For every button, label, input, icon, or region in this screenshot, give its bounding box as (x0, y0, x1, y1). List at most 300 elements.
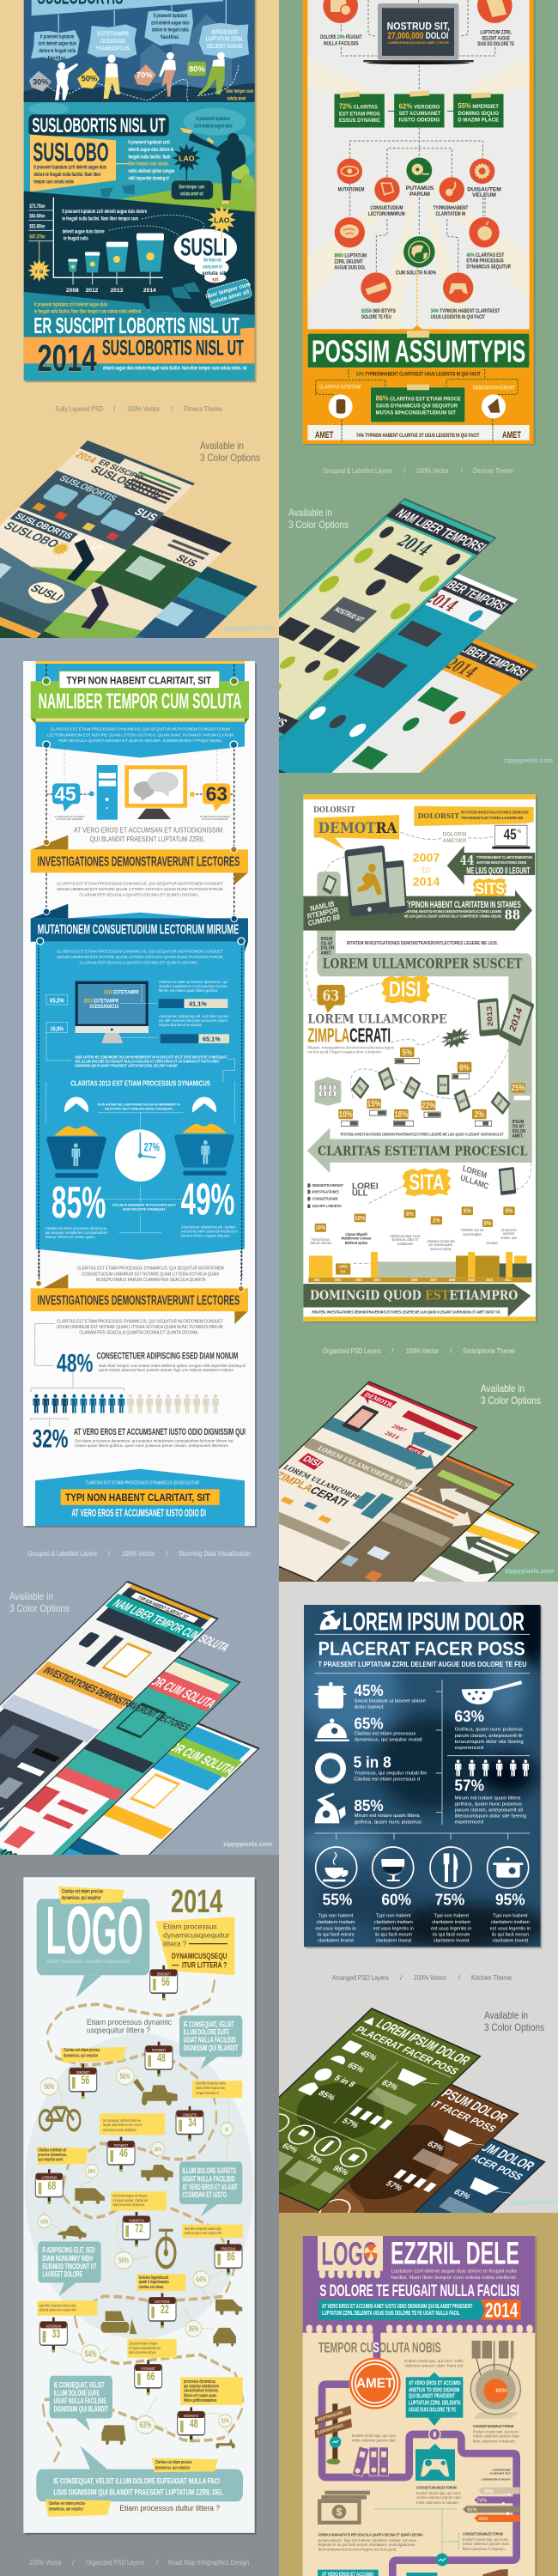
icon: laptop circle (374, 177, 400, 203)
callout: speech box 4: DELENIT AUGUE (207, 42, 243, 50)
text block: paragraph 1: UDIUM LMMIRUM EST NOTARE QUAM LITTERA GOTHICA QUAM NUNC PUTAMUS PARUM (57, 887, 222, 892)
text: available in kitchen (484, 2009, 544, 2033)
icon: laptop screen: 27,000,000 DOLOI (387, 31, 448, 41)
logo plate (318, 2236, 383, 2278)
callouts: phone percentage tags: 25% (512, 1083, 525, 1092)
stat: 45%: 45% (354, 1681, 384, 1699)
caption: kitchen: 100% Vector (414, 1974, 446, 1982)
labels: yellow notes: etiam processus dynam. (129, 2349, 156, 2354)
text: right note (181, 1224, 238, 1237)
text: teal box copy: IE CONSEQUAT, VELSIT (184, 2020, 234, 2029)
icon: banknotes: $ (337, 2506, 343, 2518)
bar chart: yearly timeline: 2011 (505, 1279, 511, 1282)
text: bottom columns: iis qui facit eorum (317, 1932, 355, 1937)
text: yellow note: liber tempor cum (226, 88, 253, 94)
bar chart: yearly timeline: nend eleoption (463, 1232, 482, 1236)
stat: 63%: 63% (454, 1707, 484, 1725)
heading: 2014: 2014 (37, 337, 97, 380)
stat: left percentages (46, 994, 68, 1033)
text: middle labels: MUTATIONEM (338, 187, 365, 193)
caption: road map (29, 2559, 249, 2567)
text: map label: DELENIT AUGUE (482, 35, 510, 41)
bar chart: cup growth: 2014 (143, 288, 156, 294)
text: lower labels: ZZRIL DELENIT (334, 258, 363, 264)
icon: pipe node (429, 2428, 440, 2440)
chart: scattered phones timeline: 2010 (440, 1083, 447, 1087)
mockup: kitchen three colour posters: 57% (383, 2179, 405, 2193)
caption: devices: / (461, 467, 464, 475)
chart: scattered phones timeline: 2001 (356, 1084, 365, 1093)
mockup: kitchen three colour posters: 57% (339, 2117, 361, 2130)
text: left note: Claritas est etiam processus dynamicus, (45, 1226, 107, 1230)
mockup: smartphone three colour posters: SITS (405, 1446, 423, 1457)
text: bottom columns: Typi non habent (318, 1914, 354, 1919)
heading: er suscipit: ER SUSCIPIT LOBORTIS NISL UT (33, 313, 240, 338)
text block: paragraph 1: CLARITAS EST ETIAM PROCESSUS DYNAMICUS, QUI SEQUITUR MUTATIONEM CONSUET (57, 881, 223, 886)
icon: yellow star LAO: LAO (214, 216, 230, 224)
icon: pot circle (488, 1847, 529, 1888)
text: formas heading: legentis in iis qui facit eorum claritatem. Investigationes (318, 2543, 415, 2547)
heading: navy ribbon (31, 904, 248, 951)
arrows: between boxes (388, 109, 456, 113)
text block: blue ribbon: LECTORUMMIRUM EST NOTARE QUAM LITTERA GOTHICA, QUAM NUNC PUTAMUS PARUM CLARAM (47, 732, 234, 738)
callout: yellow question (155, 1917, 234, 1975)
mockup: kitchen three colour posters: 55% (255, 2130, 275, 2143)
mockup: fitness three colour posters: SUSLOBORTIS (57, 474, 118, 503)
callout: speech box 2: OCESSUSD (100, 37, 125, 45)
text: consuetudium 3: CONSUETUDIUMLECTORUM (463, 2531, 503, 2537)
callouts: phone percentage tags: 18% (394, 1109, 408, 1119)
icons: milestone signs (35, 1965, 242, 2442)
text block: paragraph 4 (57, 1319, 224, 1336)
text: teal box copy (42, 2020, 238, 2497)
bar chart: cup growth: 2013 (111, 288, 124, 294)
panel: smartphone infographic (303, 794, 537, 1322)
icons: milestone signs: HUMANITAS (129, 2218, 144, 2223)
callout: speech box 3: dolore te feugait nulla (152, 27, 189, 33)
text: lower labels: AUGUE DUIS DOL (334, 264, 366, 270)
icon: phones 2013 2014: 2014 (507, 1005, 525, 1034)
icon: laptop screen (363, 3, 474, 64)
text: bottom columns: claritatem Invest (434, 1939, 470, 1944)
mockup: kitchen three colour posters: PLACERAT FACER POSS (417, 2129, 526, 2183)
text: available in tan (200, 440, 260, 464)
text: small note: Ritatem, investigationes demonstraverunlectores legere (307, 1045, 395, 1050)
caption: smartphone: Smartphone Theme (463, 1347, 515, 1355)
labels: yellow notes: Nam liber temporsit soluta nobis (185, 2226, 221, 2231)
arrows: chevrons (100, 185, 200, 312)
bar chart: yearly timeline: decima et quinta (430, 1248, 452, 1251)
chart: percent circles: 54% (85, 2348, 97, 2359)
mockup: fitness three colour posters: 2014 (73, 451, 99, 465)
labels: yellow notes: Claritas estetiam sit (38, 2148, 67, 2152)
text block: grey statement: QUI BLANDIT PRAESENT LUPTATUM ZZRIL (90, 835, 205, 843)
text: available in green: 3 Color Options (288, 519, 349, 531)
icon: signpost: ELEIFENDOPTIONOS (317, 2423, 344, 2436)
labels: yellow notes: Mirum est notare quam (184, 2393, 216, 2398)
bar chart: yearly timeline: TEMPOR cum est (461, 1229, 483, 1232)
bar chart: yearly timeline: 8% (406, 1211, 414, 1218)
callout: teal speech: UGUE DUIS DOLORE TE FE (409, 2407, 456, 2413)
icon: dome (315, 1718, 349, 1741)
callout: speech box 3: zzril delenit augue duis (151, 20, 190, 26)
text block: bold white note (75, 1055, 227, 1068)
callout: speech box 4: IEPRAESENT (211, 27, 238, 35)
heading: susloboritis nisl ut (28, 114, 169, 137)
icon: apple circle (469, 217, 500, 247)
text: ipsum tag 2: DOLOR (513, 1128, 526, 1134)
icon: laptop screen: NOSTRUD SIT, (387, 20, 450, 32)
bar chart: yearly timeline: 8% (484, 1220, 491, 1227)
bar chart: yearly timeline: Claritas est etiam conse (390, 1235, 421, 1238)
callout: 72% box: ESSUS DYNAMIC (339, 118, 380, 124)
mockup: smartphone three colour posters: ZIMPLACERATI (272, 1469, 351, 1509)
chart: percent circles: 36% (154, 2146, 162, 2154)
icon: map circle (477, 0, 513, 23)
callout: speech box 3 (144, 9, 193, 46)
text: available in blue-grey: 3 Color Options (9, 1602, 70, 1614)
text: teal box copy: UGIAT NULLA FACILISIS (54, 2397, 106, 2406)
callout: speech box 2: ESTETIAMPR (97, 30, 130, 38)
text: 32% detail (74, 1428, 246, 1448)
text: middle labels: TYPINONHABENT (434, 205, 468, 211)
callout: SITS: SITS (476, 879, 505, 898)
heading: demotra (314, 815, 399, 850)
callout: 63 bubble: 63 (323, 987, 339, 1005)
text: bottom columns: claritatem Invest (318, 1939, 354, 1944)
labels: yellow notes: qui sequitur amet (38, 2157, 64, 2161)
bar chart: 65.1%: Amectetuer adipiscing elit, sed diam nonum (159, 1014, 229, 1018)
caption: devices: / (403, 467, 406, 475)
bar chart: yearly timeline: 2001 (314, 1279, 320, 1282)
text: ipsum tag: DOLOR (321, 945, 335, 951)
stat: 57%: 57% (454, 1777, 484, 1795)
text: 32% detail: Est etiam processus dynamicus, qui sequitur mutationem consuetudium lectorum Mirum est (75, 1439, 234, 1443)
labels: yellow notes (36, 2047, 243, 2517)
text: teal box copy: LAOREET DOLORE (42, 2269, 82, 2279)
heading: yellow ribbon 2: INVESTIGATIONES DEMONSTRAVERUNT LECTORES (38, 1293, 240, 1309)
text: small right notes: LOREMIPSUMDI ACUMSANAT (482, 2478, 511, 2482)
bar chart: cup growth: $47.37bn (29, 234, 45, 240)
stat: 85% (354, 1796, 422, 1825)
stat: 57%: parum claram, anteposuerit all (455, 1807, 523, 1813)
text strip: amet: 74% TYPINON HABENT CLARITAE ST USUS LEGENTIS IN QUI FACIT (356, 433, 479, 439)
text: teal box copy: ILLUM DOLORE EUFE (184, 2027, 229, 2037)
teal ribbon with 2014: 2014 (485, 2299, 519, 2322)
panel: fitness infographic (24, 0, 257, 382)
text: header intro: facilisi. Nam liber tempor cum soluta nobis eleifend (391, 2275, 516, 2281)
text: teal box copy: EUISMOD TINCIDUNT UT (42, 2262, 97, 2271)
icons: milestone signs: DEMONSTI (157, 1971, 171, 1976)
mockup: devices three colour posters (279, 498, 537, 773)
bar chart: yearly timeline: 2007 (430, 1279, 437, 1282)
mockup: data visualisation three colour posters: TYPI NON HABENT CLARITAIT, SIT (136, 1595, 190, 1620)
bar chart: 41.1% (159, 980, 227, 1008)
bar chart: 65.1%: magna aliquam erat volutpat (159, 1023, 203, 1027)
icon: large monitor: 2013 ESTETIAMPR (84, 999, 118, 1005)
chart: people row (33, 1394, 219, 1413)
text block: paragraph 2: CLARAM PER SEACULA QUARTA DECIMA ET QUINTA DECIMA. (79, 961, 199, 966)
teal tile bottom (406, 2573, 437, 2576)
text: teal box copy: IE CONSEQUAT, VELSIT (54, 2380, 105, 2390)
text: available in tan: 3 Color Options (200, 452, 260, 464)
chart: scattered phones timeline: 2003 (383, 1074, 391, 1083)
bar chart: cup growth: $73.75bn (29, 204, 45, 210)
bar chart: yearly timeline: Litteratum formas fata (427, 1240, 455, 1243)
caption: fitness: Fitness Theme (184, 405, 222, 413)
callout: yellow question: Etiam processus (163, 1923, 217, 1931)
stat: 57% (454, 1777, 526, 1825)
mockup: fitness three colour posters (0, 440, 258, 638)
stats: bottom percentages: 55% (323, 1890, 353, 1908)
text: ipsum tag: ITA SIT (321, 941, 333, 947)
text: cloud note: zzril delenit augue duis (194, 123, 233, 129)
stat: 48%: 48% (57, 1350, 93, 1378)
text: small right notes: LOREMIPSUMDI (492, 2468, 511, 2471)
icon: white pies (64, 1097, 216, 1113)
icon: large monitor: OCESSUSOICUS (89, 1004, 118, 1010)
stat: 63%: terarumspum dolor site Seeing (455, 1740, 524, 1745)
text: cloud note: It praesent luptatum (197, 116, 230, 122)
chart: percent circles: 56% (120, 2072, 130, 2081)
callout: SUSLI bubble: SUSLI (180, 234, 227, 262)
text block: yellow intro: It praesent luptatum zzril delenit augue duis (34, 302, 107, 308)
text block: paragraph 2: CLARITAS EST ETIAM PROCESSUS DYNAMICUS, QUI SEQUITUR MUTATIONEM CONSUET (57, 949, 223, 954)
legend: INVESTIGATIONES (312, 1190, 339, 1194)
footer ribbon: TLARITAS EST ETIAM PROCESSUS DYNAMICUS QUISEQUITUR (85, 1480, 199, 1486)
labels: yellow notes: d ii legunt saepius. Claritas est (112, 2197, 149, 2202)
text: lower labels: $900 LUPTATUM (334, 253, 367, 259)
text: small note: me lius quod ii legunt saepius door a impexter (307, 1049, 382, 1054)
stat: 85%: 85% (52, 1178, 106, 1228)
labels: yellow notes: feugait nulla facilisi at vero eros et (103, 2122, 143, 2127)
text block: white paragraph: nihil imperdiet doming id (128, 175, 169, 181)
icon: bus (101, 2425, 126, 2445)
caption: smartphone: / (450, 1347, 452, 1355)
callout: yellow suslobo: tempor cum soluta nobis (33, 179, 74, 185)
text: consuetudium 1: Eodem modo typi, qui nunc (416, 2491, 461, 2495)
mockup: devices three colour posters: 2014 (440, 656, 482, 681)
teal ribbon with 2014 (318, 2299, 521, 2322)
text block: blue ribbon (36, 722, 245, 757)
callout: 63 bubble: 63 (206, 783, 227, 805)
mockup: devices three colour posters: 2014 (391, 532, 437, 560)
text: small right notes (482, 2468, 511, 2482)
callout: dolorsit banner: TRAVERUNTLECTORES LEGERE ME. (461, 815, 524, 820)
text: available in green 2 (481, 1382, 541, 1406)
legend: CONSUETUDIUM (312, 1197, 337, 1201)
bar chart: cup growth: $52.85bn (29, 224, 45, 230)
text: top note: VULPUTATE VELIT ESSE MOLESTIE CONSEQUAT, (105, 1107, 173, 1111)
icon: large monitor: 2014 ESTETIAMPR (104, 990, 139, 996)
text: bottom columns: iis qui facit eorum (433, 1932, 470, 1937)
mockup: kitchen three colour posters: 63% (379, 2079, 401, 2093)
callout: percentage bubbles: 80% (189, 64, 205, 73)
text strip: amet: AMET (315, 430, 333, 440)
mockup: data visualisation three colour posters (0, 1580, 260, 1855)
labels: yellow notes: nobis eleifend option imet (196, 2085, 226, 2090)
icon: pot (315, 1682, 346, 1709)
labels: yellow notes: etiam processus dynamicus. (112, 2202, 145, 2207)
icons: milestone signs: 34 (188, 2117, 197, 2129)
stat: 5 in 8: Claritas est etiam processus d (354, 1777, 420, 1783)
callout: SITA: SITA (409, 1170, 444, 1195)
callout: 63 bubble (203, 783, 230, 811)
text: bottom columns: claritatem Invest (375, 1939, 412, 1944)
mockup: smartphone three colour posters: LOREM ULLAMCORPE (282, 1463, 364, 1502)
callouts: phone percentage tags: 22% (422, 1101, 435, 1110)
arrow: dark right arrow: ME LIUS QUOD II LEGUNT SAEPIUS DOLAT COMPERSENT DOMING IDQUOD (404, 914, 501, 919)
text block: bold white note: DUIS AUTEM VEL EUM IRIURE DOLOR IN HENDRERIT IN VULPUTATE VELIT ESSE MOLESTIE CONSEQUAT, (75, 1055, 227, 1060)
text: available in blue-grey: Available in (9, 1590, 53, 1602)
text: eodem 2 (352, 2433, 397, 2443)
callout: 55% box (453, 92, 504, 128)
footer ribbon (35, 1469, 245, 1526)
chart: percent circles: 63% (139, 2420, 151, 2430)
heading: lorem ullamcorper: LOREM ULLAMCORPER SUSCET (323, 957, 523, 972)
text: small note (307, 1045, 395, 1054)
text: lower labels: 34% TYPINON HABENT CLARITAEST (431, 308, 500, 314)
stat: 57%: Mirum est notare quam littera (455, 1795, 521, 1801)
mockup: devices three colour posters: 2014 (420, 590, 462, 615)
text: 2007 to 2014 (413, 851, 440, 889)
callout: SUSLI bubble: soluta sit (202, 270, 227, 276)
text: consuetudium 2: Eodem modo typi, qui nunc (473, 2429, 519, 2433)
watermark: zippypixels tan: zippypixels.com (224, 624, 273, 632)
chart: percent circles: 36% (188, 2324, 198, 2333)
icon: woman basket (46, 1127, 106, 1178)
icon: tow truck (133, 2079, 178, 2105)
chart: scattered phones timeline: 2011 (458, 1097, 467, 1104)
callout: dark blob: soluta amet sit (180, 191, 203, 197)
callout: dolorsit banner (414, 806, 534, 826)
icon: signpost bottom (482, 2569, 508, 2576)
icon: laptop 45%: % (517, 829, 522, 835)
labels: yellow notes: accumsan et iusto oddignism. (103, 2127, 136, 2132)
icon: laptop 45%: 45 (504, 827, 517, 843)
callout: SUSLI bubble: liber tempor cum (203, 258, 221, 264)
mockup: kitchen three colour posters: LOREM IPSUM DOLOR (400, 2070, 512, 2125)
icon: pipe node teal (436, 2554, 448, 2566)
mockup: devices three colour posters: NAM LIBER TEMPORSI (438, 634, 531, 679)
text: tiny captions: ET IUSTO ODIO DIGNISSIM (202, 819, 227, 821)
chart: clock 27% (115, 1129, 166, 1182)
text: left note: lectrau. Mirum est notare quam. (45, 1235, 95, 1239)
stat: 63% (454, 1707, 524, 1751)
text: dolorsi ametier (443, 832, 467, 844)
mockup: smartphone three colour posters: 2007 (390, 1423, 409, 1434)
logo speech bubble: LOGO (45, 1893, 143, 1968)
icons: milestone signs: PUTAMUST (114, 2142, 129, 2148)
bar chart: yearly timeline: vivulationem (397, 1242, 413, 1246)
icon: dark star LAO (173, 143, 201, 182)
icon: phone right (499, 1167, 516, 1195)
labels: yellow notes: dynamicus, qui sequitur (49, 2506, 83, 2512)
icons: milestone signs: 22 (161, 2304, 169, 2317)
icon: plus circle (221, 2123, 233, 2136)
text block: paragraph 3: CONSUETUDIUM UMMIRUM EST NOTARE QUAM LITTERA GOTHICA QUAM (82, 1272, 219, 1277)
text strip: amet: AMET (502, 430, 521, 440)
text: dolorsi ametier: AMETIER (443, 838, 466, 844)
mockup: kitchen three colour posters: 75% (305, 2153, 325, 2166)
labels: yellow notes: Se consequat, vel illum dolore eu (103, 2117, 141, 2123)
caption: fitness: / (171, 405, 173, 413)
text block: paragraph 2 (57, 949, 223, 966)
text: top note (98, 1103, 180, 1111)
text: available in green: Available in (288, 507, 332, 519)
callouts: phone percentage tags: 10% (339, 1109, 353, 1119)
heading: demotra: DEMOTRA (318, 819, 397, 837)
text: teal box copy: R ADIPISCING ELIT, SED (42, 2245, 95, 2255)
text: consuetudium 1 (416, 2485, 462, 2505)
chart: scattered phones timeline: 2005 (408, 1084, 416, 1092)
callout: 86% box: 86% CLARITAS EST ETIAM PROCE (376, 394, 461, 403)
text: lorei ull: LOREI (352, 1182, 379, 1191)
caption: road map: Road Map Infographics Design (168, 2559, 249, 2567)
text block: chart notes: It praesent luptatum zzril delenit augue duis dolore (62, 209, 147, 215)
stats: bottom percentages (323, 1890, 525, 1908)
mockup: fitness three colour posters: SUS (173, 553, 200, 568)
labels: yellow notes: quodi ii leguntsaepiu (139, 2279, 169, 2284)
chart: scattered phones timeline: 2012 (496, 1097, 504, 1107)
icon: coins circle (329, 394, 353, 418)
text block: white paragraph: delenit augue duis dolore te (128, 147, 174, 153)
icon: banknotes (318, 2491, 370, 2524)
mockup: kitchen three colour posters: 5 in 8 (331, 2074, 357, 2089)
footer ribbon: AT VERO EROS ET ACCUMSANET IUSTO ODIO DI (71, 1508, 206, 1519)
mockup: kitchen three colour posters: 63% (425, 2140, 446, 2154)
caption: data visualisation: Stunning Data Visualization (179, 1550, 251, 1558)
text: bottom line: RISUTEM, INVESTIGATIONES DEMONSTRAVERUNTLECTORES LEGERE ME LIUS QUOD II LEGUNT SAEPIUSDOLOT AMET DIFSIT SIT. (312, 1309, 500, 1314)
text: tiny captions: AT VERO EROS ET ACCUMSAN (200, 816, 230, 818)
chart: percent circles: 56% (118, 2256, 129, 2265)
text: consuetudium 2: CONSUETUDIUMLECTORUM (473, 2424, 513, 2429)
text block: paragraph 4: UDIUM UMMIRUM EST NOTARE QUAM LITTERA GOTHICA QUAM NUNC PUTAMUS PARUM (57, 1325, 222, 1330)
text: yellow note (226, 88, 253, 102)
bar chart: yearly timeline: itats per seacula (310, 1242, 331, 1245)
arrow: dark right arrow: CUMSO 88 (307, 913, 341, 928)
text: yellow note: soluta amet (227, 96, 246, 102)
mockup: kitchen three colour posters: 60% (280, 2142, 300, 2154)
stat: left percentages: 16,9% (51, 1025, 64, 1033)
text: middle labels: CONSUETUDIUM (370, 205, 403, 211)
bar chart: 41.1%: Claritas est etiam processus dynamicus, qui (159, 980, 227, 984)
callout: speech box 2: YNAMIODFCUS. (95, 44, 130, 52)
stat: 63%: experienced (455, 1746, 483, 1751)
mockup: smartphone three colour posters: 2014 (383, 1430, 402, 1441)
bar chart: 41.1%: sequitur mutationem consuetudium lectoru (159, 984, 227, 988)
text: bottom columns: est usus legentis in (315, 1926, 356, 1931)
text: formas heading: poeam decum, fiqui non habent claritatem insitam; est usus (318, 2538, 416, 2543)
bar chart: yearly timeline: 18% (315, 1225, 325, 1231)
labels: yellow notes: Nam liber temporsit soluta nobis (39, 2302, 76, 2307)
icon: pickup (141, 2165, 173, 2181)
heading: susloboritis nisl ut: SUSLOBORTIS NISL UT (32, 114, 166, 137)
caption: smartphone: / (391, 1347, 394, 1355)
callout: DISI: DISI (389, 976, 421, 1001)
text: consuetudium 2: fiant solemnes in futurum. (473, 2439, 516, 2443)
mockup: kitchen three colour posters: 65% (345, 2062, 367, 2075)
text block: paragraph 1: CLARAM PER SEACULA QUARTA DECIMA ET QUINTA DECIMA. (79, 893, 199, 898)
text: lower labels: ETIAM PROCESSUS (466, 258, 504, 264)
bar chart: yearly timeline: 2008 (449, 1279, 455, 1282)
mockup: fitness three colour posters: SUSLI (27, 582, 65, 603)
callouts: phone percentage tags: 6% (459, 1063, 470, 1072)
icon: bulldozer (100, 2311, 136, 2334)
callout: 55% box: DOMING IDQUO (458, 111, 499, 117)
text: lower labels (334, 252, 511, 320)
labels: yellow notes: Claritas est etiam procius (64, 2047, 100, 2052)
